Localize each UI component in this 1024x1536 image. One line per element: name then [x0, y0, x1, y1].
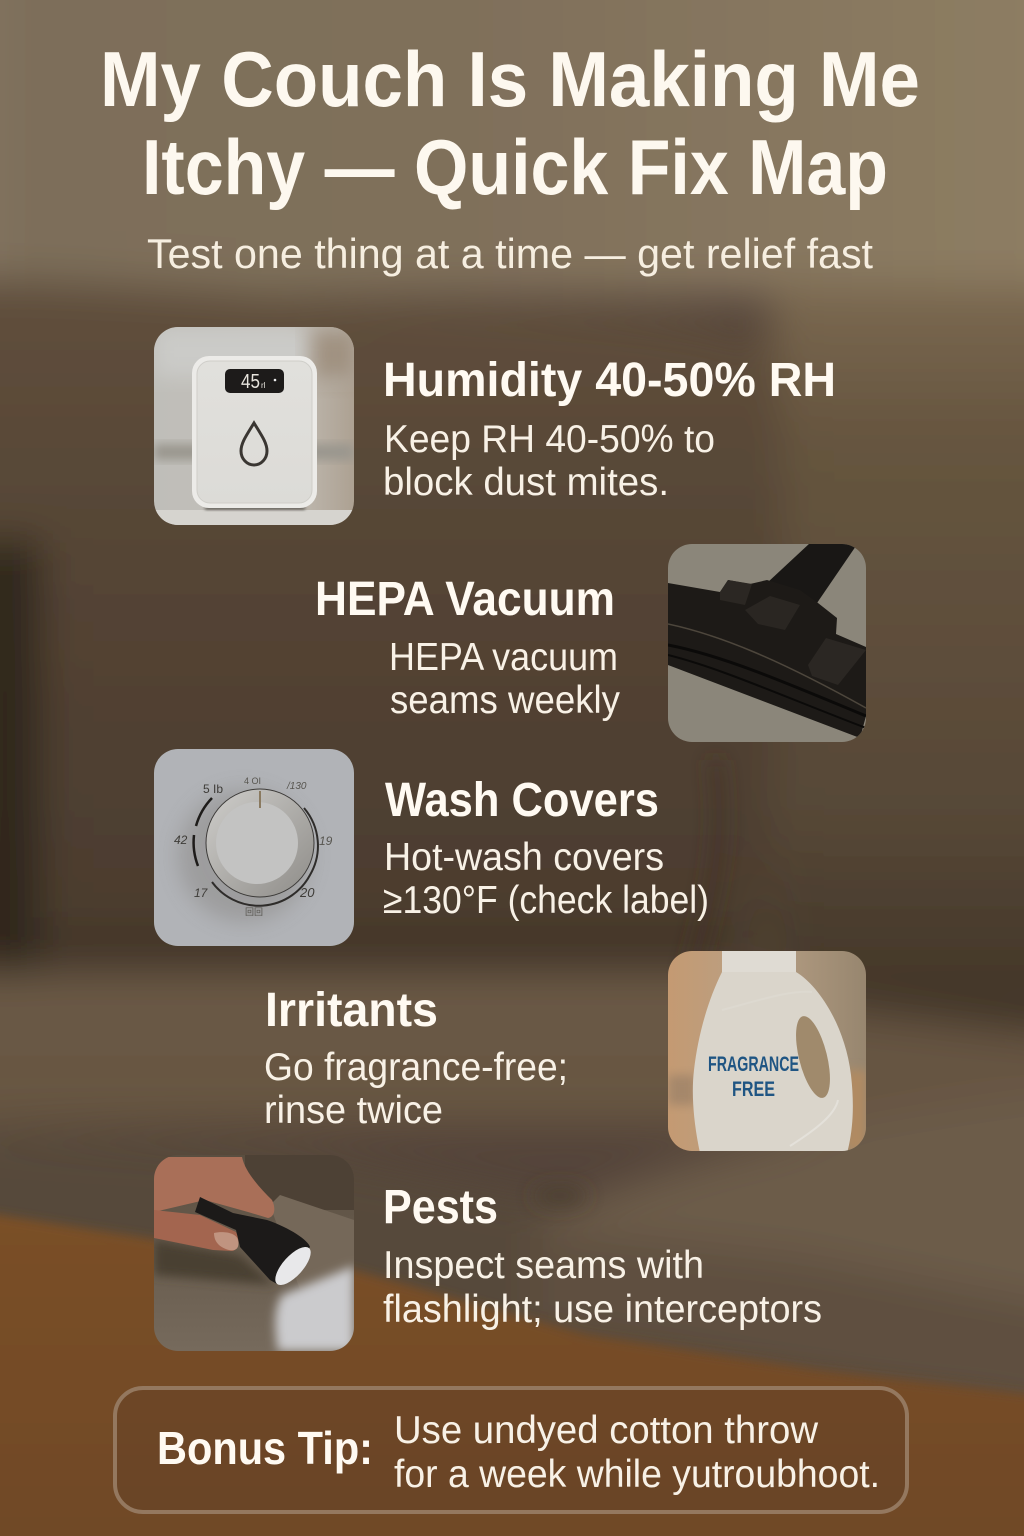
- photo: washer dial: 5 Ib: [203, 782, 223, 796]
- bonus tip text: Use undyed cotton throw: [394, 1409, 819, 1452]
- body: pests: flashlight; use interceptors: [383, 1288, 822, 1331]
- body: irritants: Go fragrance-free;: [264, 1046, 568, 1089]
- heading: pests: Pests: [383, 1181, 498, 1234]
- body: wash covers: Hot-wash covers: [384, 836, 664, 879]
- body: pests: Inspect seams with: [383, 1244, 704, 1287]
- panel: HEPA vacuum: [315, 543, 866, 742]
- callout: bonus tip: [115, 1388, 907, 1512]
- heading: irritants: Irritants: [265, 984, 438, 1037]
- bonus tip text: [394, 1409, 880, 1496]
- subtitle: Test one thing at a time — get relief fast: [147, 230, 873, 277]
- body: HEPA vacuum: seams weekly: [390, 679, 620, 722]
- body: wash covers: [383, 836, 709, 922]
- photo: humidity monitor: rl: [261, 381, 266, 390]
- photo: washer dial: 4 OI: [244, 776, 261, 786]
- photo: fragrance-free bottle: FRAGRANCE: [708, 1053, 799, 1076]
- bonus tip text: for a week while yutroubhoot.: [394, 1453, 880, 1496]
- panel: humidity: [154, 327, 836, 526]
- title: Itchy — Quick Fix Map: [142, 123, 888, 211]
- bonus tip label: Bonus Tip:: [157, 1422, 373, 1474]
- photo: fragrance-free bottle: [668, 951, 866, 1153]
- body: irritants: [264, 1046, 568, 1132]
- body: wash covers: ≥130°F (check label): [383, 879, 709, 922]
- heading: HEPA vacuum: HEPA Vacuum: [315, 573, 615, 626]
- body: humidity: Keep RH 40-50% to: [384, 418, 715, 461]
- photo: washer dial: 19: [319, 834, 333, 848]
- photo: fragrance-free bottle: FREE: [732, 1078, 775, 1101]
- photo: humidity monitor: [154, 327, 360, 526]
- body: humidity: [383, 418, 715, 504]
- photo: humidity monitor: 45: [241, 371, 260, 393]
- photo: washer dial: /130: [286, 781, 307, 792]
- panel: irritants: [264, 951, 866, 1153]
- photo: flashlight on couch seam: [154, 1155, 355, 1351]
- body: irritants: rinse twice: [264, 1089, 443, 1132]
- photo: washer dial: [154, 749, 354, 946]
- heading: humidity: Humidity 40-50% RH: [383, 354, 836, 407]
- panel: wash covers: [154, 749, 709, 946]
- photo: washer dial: 20: [299, 885, 315, 900]
- title: [100, 35, 920, 211]
- panel: pests: [154, 1155, 822, 1351]
- photo: washer dial: 回回: [245, 907, 263, 917]
- photo: washer dial: 17: [194, 886, 209, 900]
- body: humidity: block dust mites.: [383, 461, 669, 504]
- photo: vacuum nozzle: [668, 543, 866, 742]
- heading: wash covers: Wash Covers: [385, 774, 659, 827]
- title: My Couch Is Making Me: [100, 35, 920, 123]
- body: HEPA vacuum: [389, 636, 620, 722]
- photo: washer dial: 42: [174, 833, 188, 847]
- body: HEPA vacuum: HEPA vacuum: [389, 636, 618, 679]
- body: pests: [383, 1244, 822, 1331]
